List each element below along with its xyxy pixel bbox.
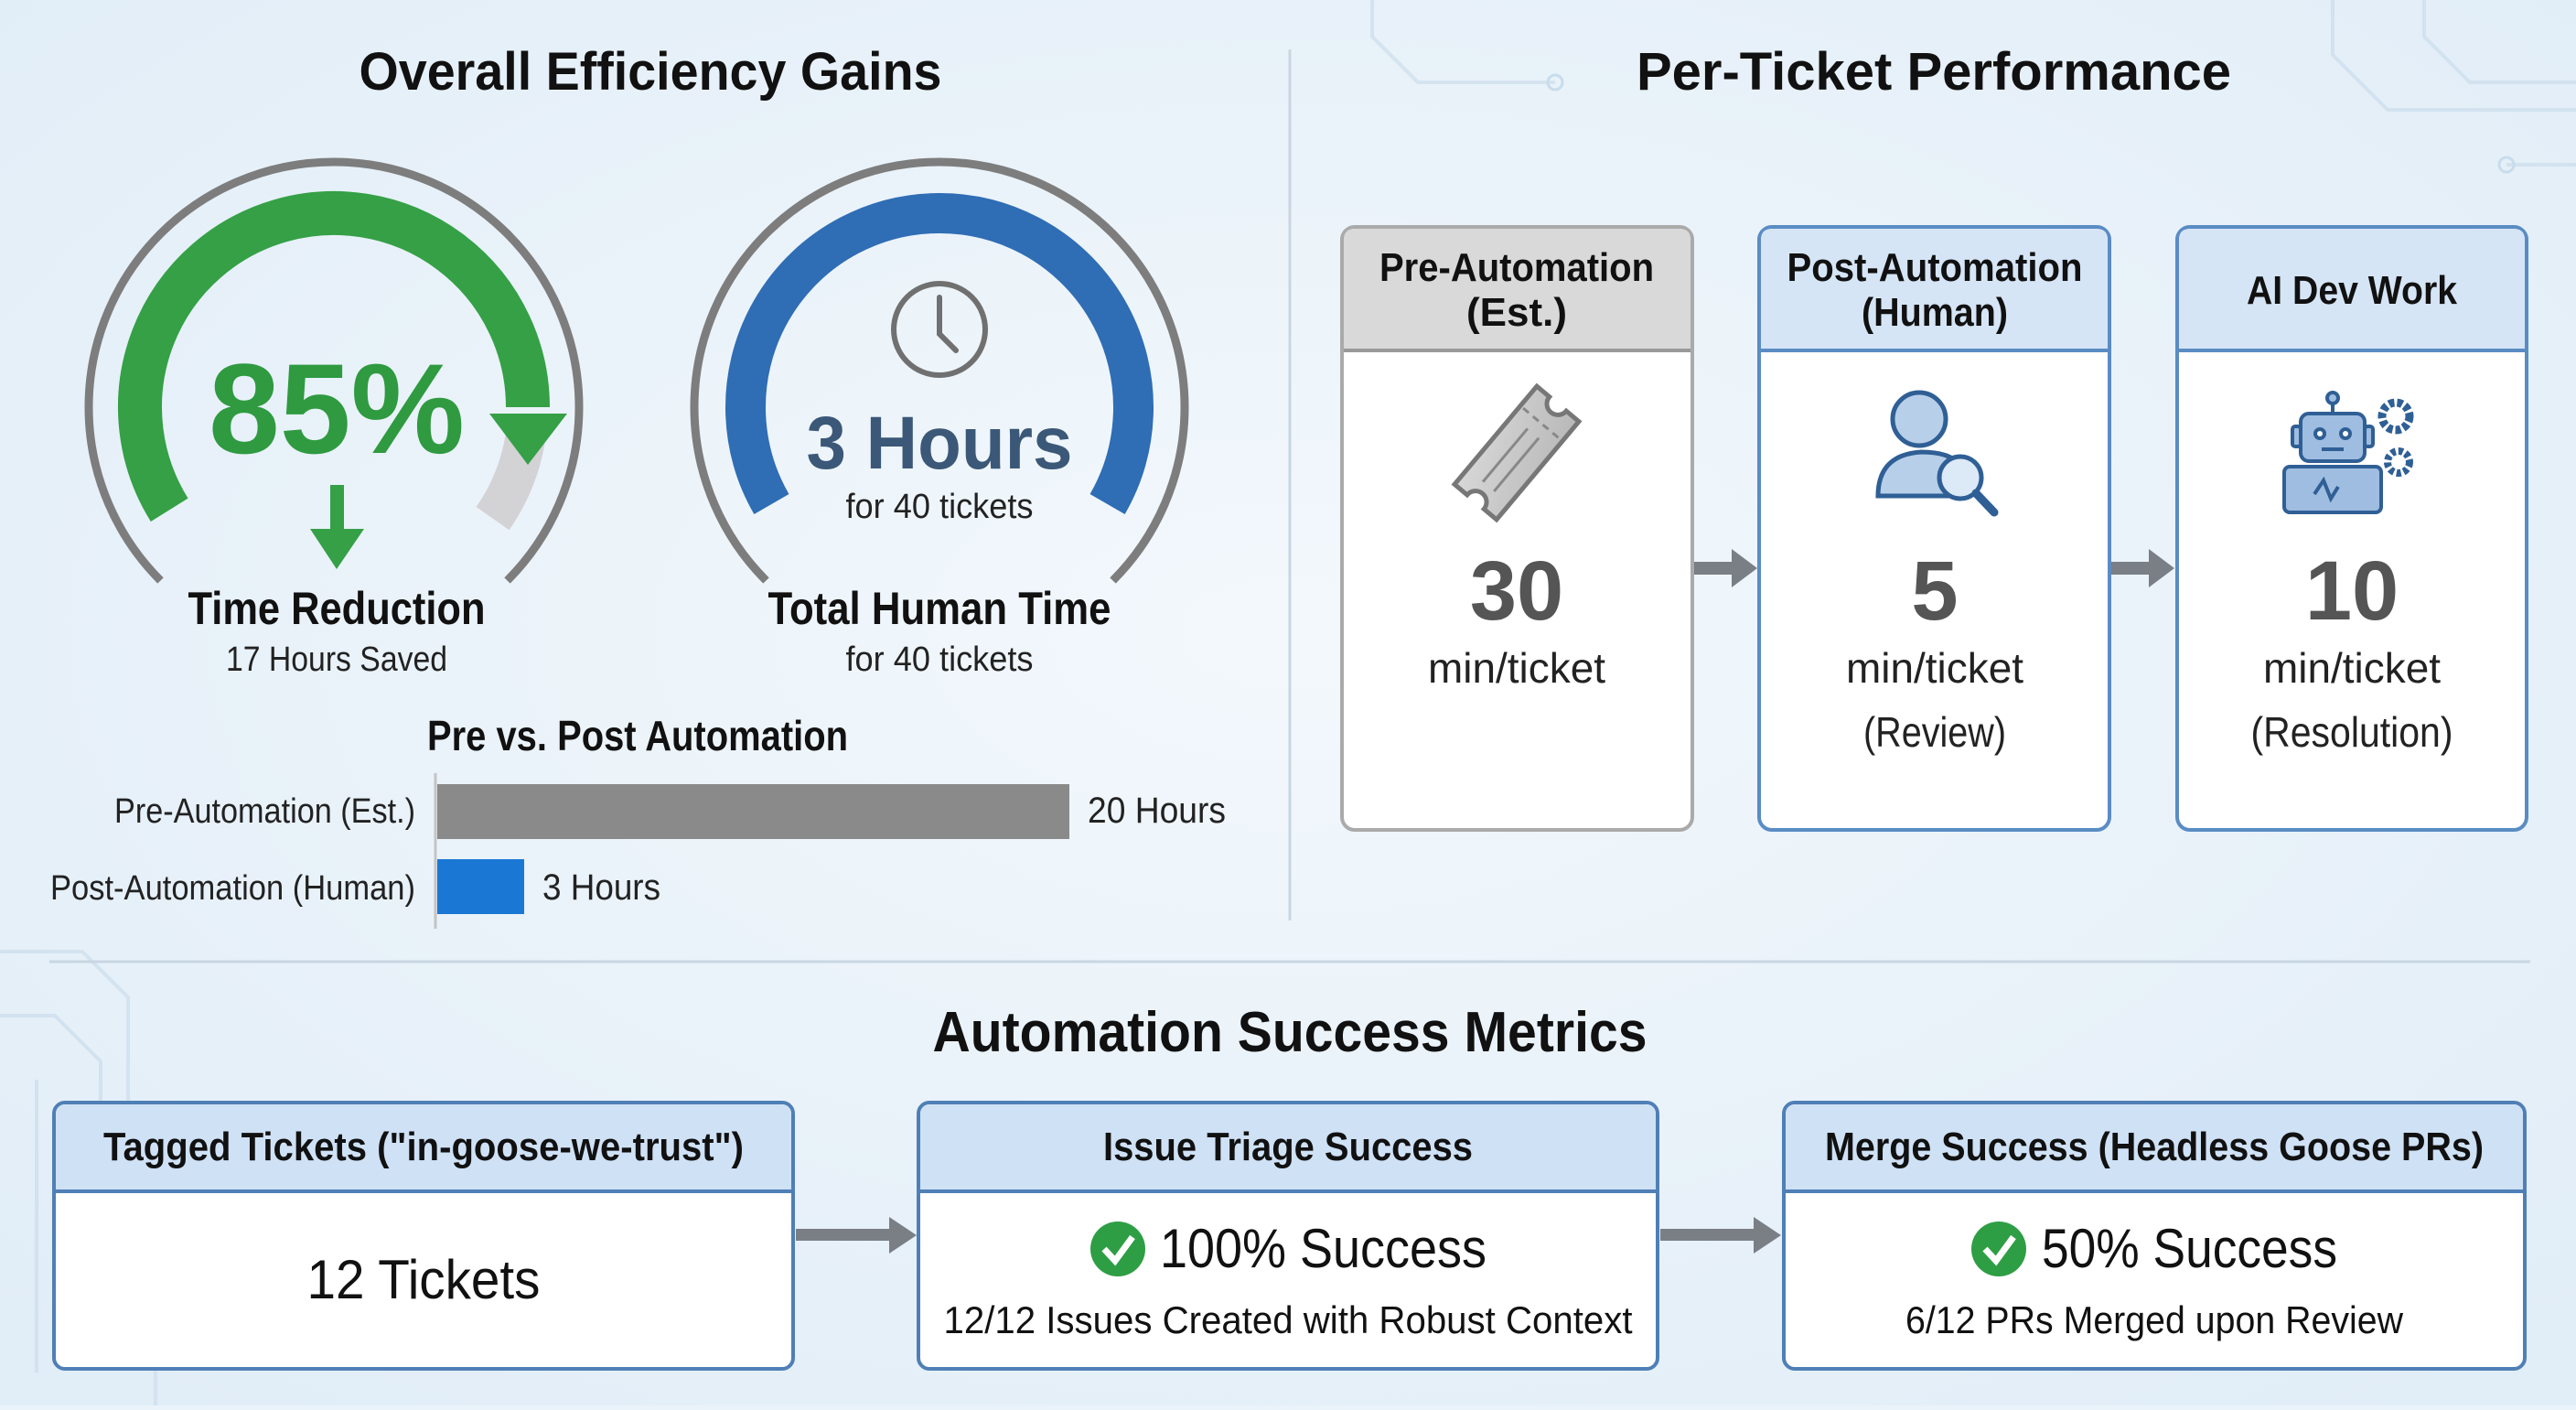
card: Post-Automation (Human) bbox=[1759, 227, 2109, 830]
title: Overall Efficiency Gains: Overall Efficiency Gains bbox=[359, 42, 942, 102]
box: Tagged Tickets bbox=[54, 1103, 793, 1369]
icon: person with magnifier bbox=[1878, 393, 1994, 512]
card: Pre-Automation bbox=[1342, 227, 1692, 830]
card: AI Dev Work bbox=[2177, 227, 2527, 830]
gauge: time reduction bbox=[89, 162, 579, 679]
card: Pre-Automation: min/ticket bbox=[1428, 644, 1605, 692]
gauge: total human time: for 40 tickets bbox=[845, 640, 1034, 679]
arrow bbox=[1660, 1217, 1781, 1254]
value: 3 Hours: 3 Hours bbox=[807, 402, 1072, 485]
arrow bbox=[796, 1217, 917, 1254]
bar chart: Pre vs Post Automation: 3 Hours bbox=[542, 867, 660, 908]
value: 85%: 85% bbox=[209, 337, 465, 480]
icon: check bbox=[1971, 1222, 2026, 1276]
arrow bbox=[2111, 549, 2174, 587]
bar chart: Pre vs Post Automation: Pre-Automation (Est.) bbox=[114, 792, 415, 831]
card: Pre-Automation: 30 bbox=[1470, 544, 1563, 638]
gauge: total human time bbox=[694, 162, 1185, 679]
box: Merge Success: 50% Success bbox=[2042, 1218, 2337, 1279]
bar chart: Pre vs Post Automation: Post-Automation (Human) bbox=[50, 869, 415, 908]
icon: clock bbox=[894, 284, 985, 375]
bar chart: Pre vs Post Automation: Pre vs. Post Automation bbox=[427, 712, 848, 759]
icon: down arrow bbox=[310, 485, 364, 569]
card: Post-Automation (Human): Post-Automation bbox=[1787, 245, 2082, 290]
box: Issue Triage Success: 100% Success bbox=[1160, 1218, 1487, 1279]
box: Issue Triage Success: 12/12 Issues Created with Robust Context bbox=[944, 1298, 1633, 1341]
card: Post-Automation (Human): 5 bbox=[1911, 544, 1959, 638]
card: AI Dev Work: AI Dev Work bbox=[2247, 268, 2457, 313]
card: Post-Automation (Human): min/ticket bbox=[1846, 644, 2023, 692]
box: Issue Triage Success: Issue Triage Success bbox=[1103, 1125, 1473, 1169]
icon: robot with gears bbox=[2284, 393, 2410, 512]
title: Per-Ticket Performance: Per-Ticket Performance bbox=[1637, 42, 2231, 102]
bar chart: Pre vs Post Automation: 20 Hours bbox=[1088, 791, 1226, 831]
gauge: time reduction: 17 Hours Saved bbox=[226, 640, 447, 679]
card: AI Dev Work: 10 bbox=[2305, 544, 2399, 638]
box: Issue Triage Success bbox=[918, 1103, 1658, 1369]
card: Post-Automation (Human): (Human) bbox=[1862, 290, 2008, 335]
box: Merge Success bbox=[1784, 1103, 2525, 1369]
title: Automation Success Metrics: Automation Success Metrics bbox=[933, 1001, 1647, 1064]
box: Tagged Tickets: 12 Tickets bbox=[307, 1249, 540, 1310]
card: Pre-Automation: (Est.) bbox=[1466, 290, 1567, 335]
icon: ticket bbox=[1454, 386, 1579, 520]
label: Total Human Time: Total Human Time bbox=[768, 583, 1111, 634]
card: Pre-Automation: Pre-Automation bbox=[1379, 245, 1654, 290]
gauge: total human time: for 40 tickets bbox=[845, 488, 1034, 526]
box: Merge Success: Merge Success (Headless Goose PRs) bbox=[1825, 1125, 2484, 1169]
card: Post-Automation (Human): (Review) bbox=[1863, 708, 2006, 756]
card: AI Dev Work: (Resolution) bbox=[2250, 708, 2453, 756]
box: Tagged Tickets: Tagged Tickets ("in-goose-we-trust") bbox=[103, 1125, 744, 1169]
icon: check bbox=[1090, 1222, 1145, 1276]
card: AI Dev Work: min/ticket bbox=[2263, 644, 2441, 692]
arrow bbox=[1694, 549, 1757, 587]
bar chart: Pre vs Post Automation bbox=[50, 712, 1226, 929]
label: Time Reduction: Time Reduction bbox=[188, 583, 485, 634]
box: Merge Success: 6/12 PRs Merged upon Review bbox=[1905, 1298, 2404, 1341]
